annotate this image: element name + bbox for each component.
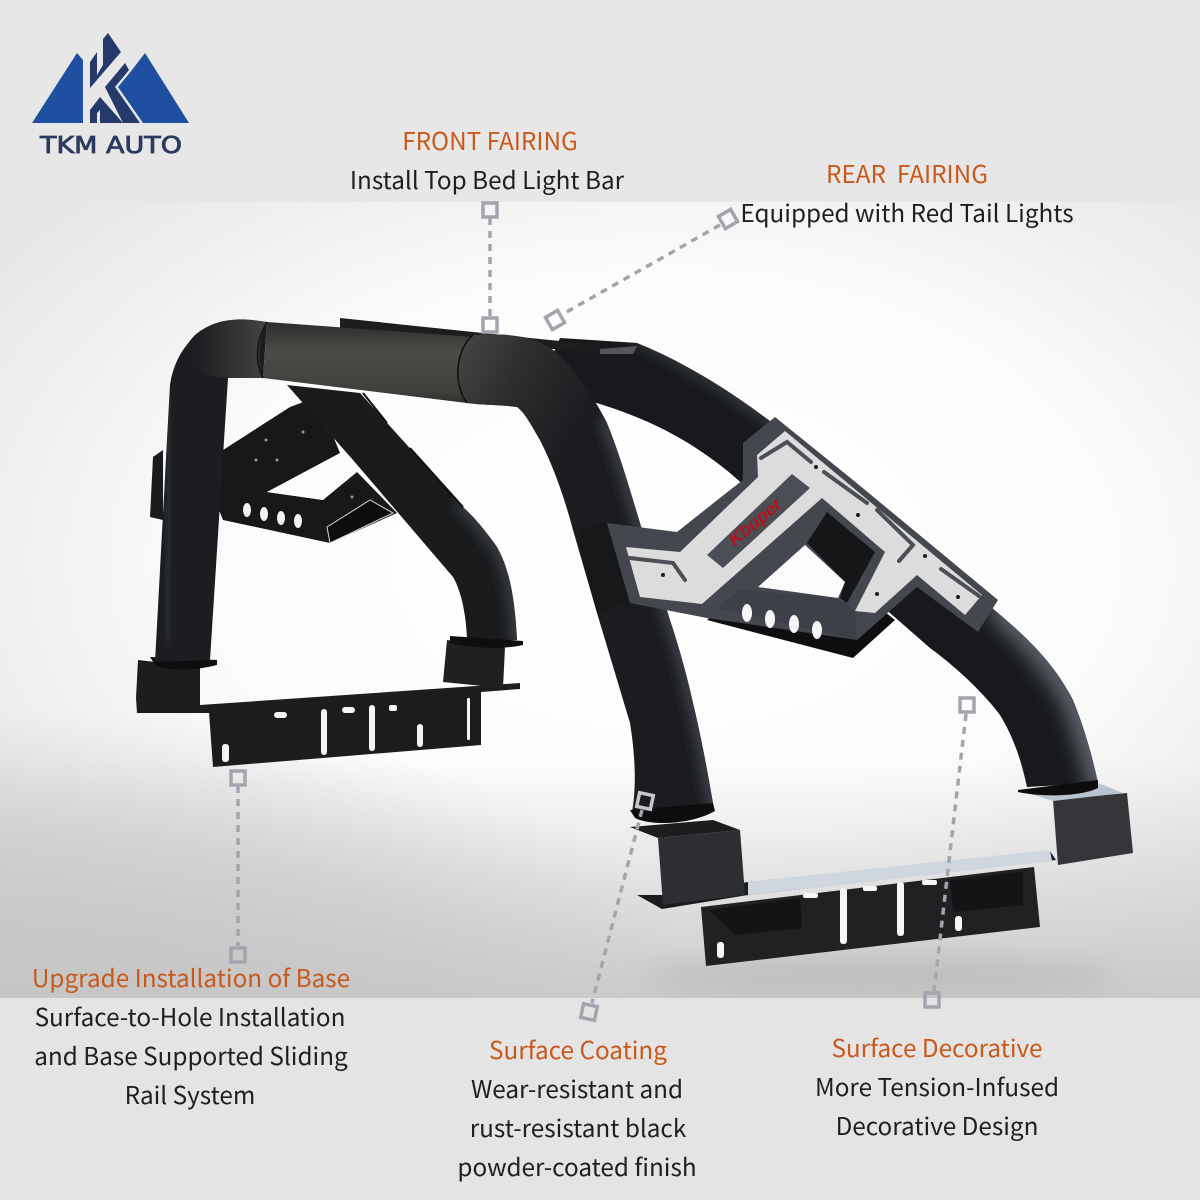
logo wordmark: TKM AUTO (39, 133, 182, 159)
callout: rear fairing (545, 155, 1074, 330)
leader line (483, 203, 497, 332)
rear side plate (607, 417, 998, 658)
description: More Tension-Infused (815, 1068, 1059, 1103)
description: powder-coated finish (457, 1148, 697, 1183)
leader line (545, 209, 738, 330)
near hoop main tube (458, 334, 715, 823)
description: Rail System (125, 1076, 255, 1111)
heading: Surface Coating (489, 1031, 667, 1066)
leader line (231, 771, 245, 962)
side clamp (150, 450, 163, 520)
far side bracket (215, 397, 397, 543)
heading: REAR FAIRING (826, 155, 988, 190)
description: and Base Supported Sliding (34, 1037, 348, 1072)
heading: FRONT FAIRING (402, 122, 578, 157)
logo: TKM AUTO (32, 33, 189, 159)
rear hoop tube (540, 338, 1100, 787)
plate window (807, 512, 875, 603)
description: Install Top Bed Light Bar (350, 161, 625, 196)
callout: upgrade installation of base (32, 771, 350, 1111)
description (34, 998, 348, 1111)
inlay grooves (630, 442, 979, 596)
tube clamp (577, 522, 630, 613)
badge: Kbuper (707, 474, 810, 568)
far rear leg tube (287, 385, 518, 643)
leader line (925, 698, 974, 1007)
plate underside (707, 600, 895, 658)
plate slots (742, 604, 822, 639)
description: Wear-resistant and (471, 1070, 683, 1105)
badge: Kbuper: Kbuper (724, 493, 786, 550)
description: Decorative Design (836, 1107, 1038, 1142)
description: Equipped with Red Tail Lights (740, 194, 1074, 229)
description: rust-resistant black (470, 1109, 687, 1144)
light inlay panel (626, 431, 982, 615)
description (815, 1068, 1059, 1142)
top crossbar fairing (178, 318, 637, 403)
plate body (607, 417, 998, 640)
heading: Surface Decorative (831, 1029, 1043, 1064)
callout: surface coating (457, 793, 697, 1183)
roll bar product illustration (136, 318, 1133, 966)
near front base (630, 780, 1133, 966)
leader line (581, 793, 653, 1020)
left hoop leg tube (155, 320, 267, 662)
callout: surface decorative (815, 698, 1059, 1142)
far side base with slots (136, 636, 523, 767)
plate bolts (661, 465, 960, 599)
description: Surface-to-Hole Installation (35, 998, 345, 1033)
heading: Upgrade Installation of Base (32, 959, 350, 994)
description (457, 1070, 697, 1183)
callout: front fairing (350, 122, 625, 332)
icon: mountain K (32, 33, 189, 123)
